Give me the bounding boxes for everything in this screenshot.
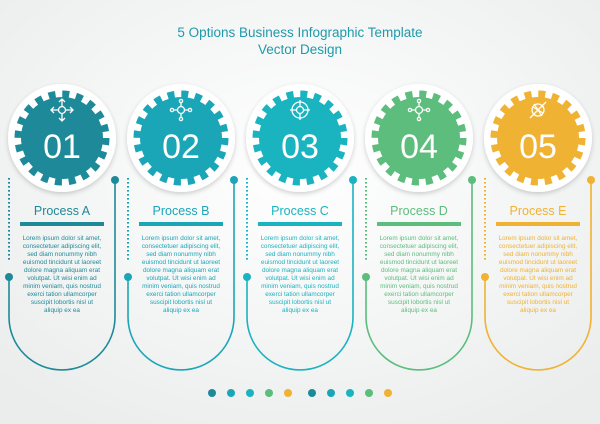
heading: Process C — [271, 204, 329, 218]
body text: volutpat. Ut wisi enim ad — [146, 275, 216, 282]
body text: dolore magna aliquam erat — [500, 267, 576, 274]
connector line — [128, 178, 234, 370]
gear 05 — [484, 84, 592, 192]
body text: suscipit lobortis nisl ut — [150, 299, 212, 306]
body text: dolore magna aliquam erat — [262, 267, 338, 274]
body text: suscipit lobortis nisl ut — [269, 299, 331, 306]
body text — [499, 235, 578, 314]
body text: sed diam nonummy nibh — [384, 251, 454, 258]
column 5: Process E — [481, 84, 595, 370]
body text — [261, 235, 340, 314]
body text: Lorem ipsum dolor sit amet, — [23, 235, 102, 242]
gear 02: 02 — [162, 128, 200, 166]
body text: Lorem ipsum dolor sit amet, — [499, 235, 578, 242]
body text: exerci tation ullamcorper — [265, 291, 336, 298]
heading: Process B — [153, 204, 209, 218]
body text: aliquip ex ea — [401, 307, 437, 314]
body text: aliquip ex ea — [163, 307, 199, 314]
title: 5 Options Business Infographic Template — [177, 25, 423, 40]
body text: exerci tation ullamcorper — [384, 291, 455, 298]
body text: consectetuer adipiscing elit, — [23, 243, 101, 250]
body text: suscipit lobortis nisl ut — [507, 299, 569, 306]
gear 04: 04 — [400, 128, 438, 166]
body text: volutpat. Ut wisi enim ad — [265, 275, 335, 282]
heading: Process D — [390, 204, 448, 218]
body text: suscipit lobortis nisl ut — [388, 299, 450, 306]
body text: euismod tincidunt ut laoreet — [23, 259, 101, 266]
gear 05: 05 — [519, 128, 557, 166]
body text: aliquip ex ea — [44, 307, 80, 314]
body text: aliquip ex ea — [520, 307, 556, 314]
gear 01: 01 — [43, 128, 81, 166]
body text: volutpat. Ut wisi enim ad — [27, 275, 97, 282]
title: Vector Design — [258, 42, 342, 57]
connector line — [485, 178, 591, 370]
body text: Lorem ipsum dolor sit amet, — [380, 235, 459, 242]
body text: consectetuer adipiscing elit, — [261, 243, 339, 250]
heading: Process E — [510, 204, 566, 218]
body text: consectetuer adipiscing elit, — [142, 243, 220, 250]
body text: suscipit lobortis nisl ut — [31, 299, 93, 306]
body text: euismod tincidunt ut laoreet — [380, 259, 458, 266]
heading: Process A — [34, 204, 91, 218]
body text: aliquip ex ea — [282, 307, 318, 314]
body text: minim veniam, quis nostrud — [142, 283, 220, 290]
body text: minim veniam, quis nostrud — [380, 283, 458, 290]
body text: sed diam nonummy nibh — [27, 251, 97, 258]
body text — [380, 235, 459, 314]
body text: Lorem ipsum dolor sit amet, — [261, 235, 340, 242]
body text: consectetuer adipiscing elit, — [380, 243, 458, 250]
body text: dolore magna aliquam erat — [24, 267, 100, 274]
connector line — [9, 178, 115, 370]
body text: exerci tation ullamcorper — [27, 291, 98, 298]
body text: euismod tincidunt ut laoreet — [261, 259, 339, 266]
column 2: Process B — [124, 84, 238, 370]
gear 02 — [127, 84, 235, 192]
gear 03: 03 — [281, 128, 319, 166]
body text: euismod tincidunt ut laoreet — [499, 259, 577, 266]
body text: volutpat. Ut wisi enim ad — [384, 275, 454, 282]
body text: volutpat. Ut wisi enim ad — [503, 275, 573, 282]
body text: minim veniam, quis nostrud — [499, 283, 577, 290]
body text: sed diam nonummy nibh — [503, 251, 573, 258]
body text: minim veniam, quis nostrud — [23, 283, 101, 290]
body text — [142, 235, 221, 314]
gear 01 — [8, 84, 116, 192]
body text: sed diam nonummy nibh — [146, 251, 216, 258]
body text: exerci tation ullamcorper — [503, 291, 574, 298]
gear 03 — [246, 84, 354, 192]
body text: sed diam nonummy nibh — [265, 251, 335, 258]
body text: Lorem ipsum dolor sit amet, — [142, 235, 221, 242]
body text: dolore magna aliquam erat — [143, 267, 219, 274]
body text: minim veniam, quis nostrud — [261, 283, 339, 290]
column 3: Process C — [243, 84, 357, 370]
column 4: Process D — [362, 84, 476, 370]
connector line — [247, 178, 353, 370]
body text: dolore magna aliquam erat — [381, 267, 457, 274]
body text: consectetuer adipiscing elit, — [499, 243, 577, 250]
body text — [23, 235, 102, 314]
connector line — [366, 178, 472, 370]
gear 04 — [365, 84, 473, 192]
column 1: Process A — [5, 84, 119, 370]
body text: exerci tation ullamcorper — [146, 291, 217, 298]
title — [177, 25, 423, 57]
pagination dots — [208, 389, 392, 397]
body text: euismod tincidunt ut laoreet — [142, 259, 220, 266]
